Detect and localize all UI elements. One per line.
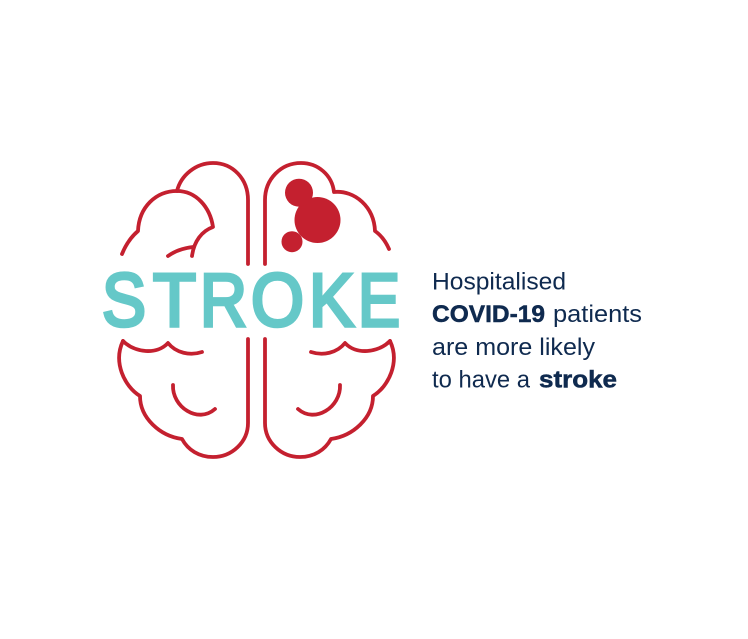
right top lobe and outer contour xyxy=(265,163,389,264)
heading: STROKE: O xyxy=(251,258,304,342)
right lower lobe outer contour xyxy=(265,339,394,457)
heading: STROKE xyxy=(102,258,400,342)
left lower top fold xyxy=(123,341,202,354)
heading: STROKE: K xyxy=(309,258,354,342)
icon: brain outline xyxy=(119,163,394,457)
text block: description xyxy=(432,268,642,394)
left upper fold xyxy=(168,247,193,256)
heading: STROKE: T xyxy=(153,258,196,342)
right lower inner fold xyxy=(298,385,340,415)
heading: STROKE: E xyxy=(358,258,400,342)
text block: description: Hospitalised xyxy=(432,268,566,296)
right lower top fold xyxy=(311,341,390,354)
left lower inner fold xyxy=(173,385,215,415)
heading: STROKE: S xyxy=(102,258,146,342)
left top lobe and midline xyxy=(177,163,248,264)
text block: description: COVID-19 xyxy=(432,301,545,328)
text block: description: stroke xyxy=(539,366,617,394)
heading: STROKE: R xyxy=(200,258,247,342)
text block: description: patients xyxy=(553,301,642,328)
text block: description: to have a xyxy=(432,366,531,394)
text block: description: are more likely xyxy=(432,334,595,361)
left lower lobe outer contour xyxy=(119,339,248,457)
icon: stroke clot circles xyxy=(282,179,340,252)
left upper lobe outer contour xyxy=(122,191,213,256)
